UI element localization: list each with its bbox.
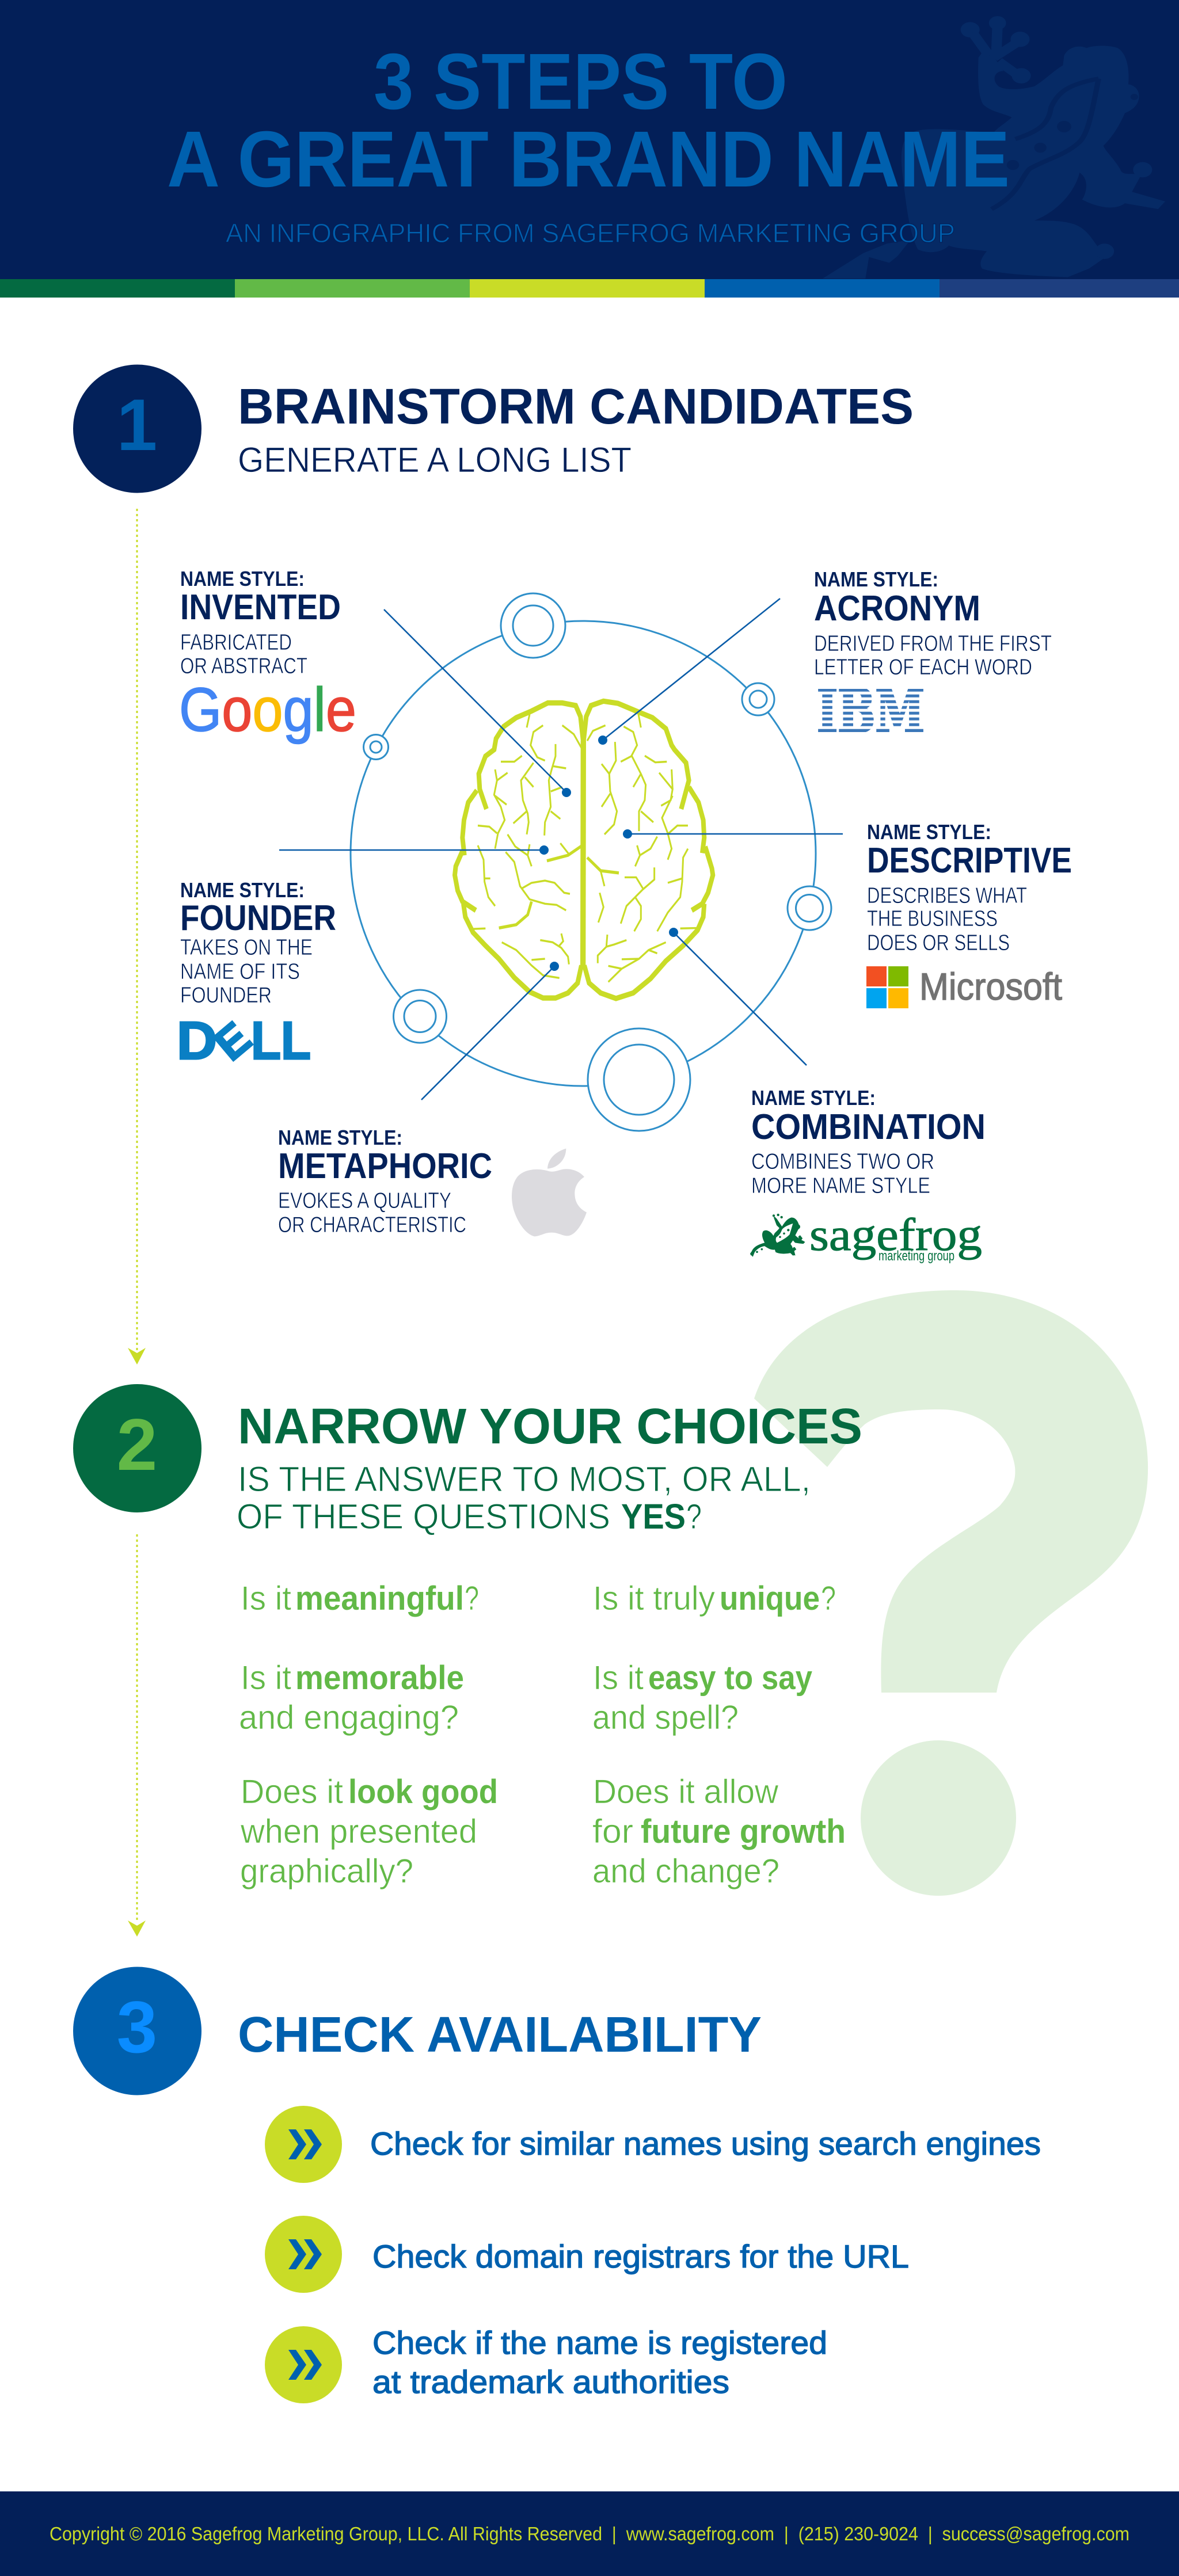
- panel: step 2 narrow your choices: [73, 1290, 1148, 1937]
- name style: acronym: LETTER OF EACH WORD: [814, 655, 1032, 680]
- subtitle: AN INFOGRAPHIC FROM SAGEFROG MARKETING GROUP: [226, 218, 955, 248]
- icon: frog watermark: [823, 16, 1165, 279]
- step 2 number badge: [73, 1384, 201, 1512]
- question: easy to say: easy to say: [648, 1659, 812, 1697]
- question: look good: Does it: [241, 1773, 343, 1811]
- name style: metaphoric: OR CHARACTERISTIC: [278, 1213, 466, 1237]
- logo: dell: [177, 1011, 311, 1070]
- icon: small frog: [751, 1214, 804, 1256]
- name style: combination: MORE NAME STYLE: [751, 1173, 930, 1198]
- logo: microsoft: Microsoft: [919, 965, 1062, 1008]
- question: memorable: [239, 1659, 464, 1736]
- name style: acronym: NAME STYLE:: [814, 567, 938, 591]
- name style: invented: [179, 567, 356, 744]
- arrow: step 1 to step 2: [128, 509, 146, 1365]
- icon: chevrons: [265, 2106, 342, 2183]
- panel: step 1 brainstorm candidates: [73, 365, 1072, 1365]
- name style: founder: TAKES ON THE: [180, 935, 313, 960]
- name style: descriptive: NAME STYLE:: [867, 820, 991, 844]
- question: future growth: Does it allow: [593, 1773, 779, 1811]
- step 1 heading: BRAINSTORM CANDIDATES: [238, 379, 914, 435]
- title: A GREAT BRAND NAME: [167, 115, 1010, 204]
- question: meaningful: ?: [465, 1580, 479, 1617]
- title: [167, 37, 1010, 204]
- name style: invented: FABRICATED: [180, 630, 292, 655]
- name style: descriptive: [866, 820, 1072, 1008]
- logo: sagefrog: [751, 1210, 982, 1264]
- step 2 subheading: OF THESE QUESTIONS: [237, 1497, 610, 1536]
- check item: domain registrars: [265, 2216, 909, 2293]
- question: memorable: Is it: [241, 1659, 291, 1697]
- panel: step 3 check availability: [73, 1967, 1041, 2403]
- name style: founder: NAME STYLE:: [180, 878, 305, 902]
- question: future growth: for: [592, 1813, 633, 1850]
- name style: metaphoric: METAPHORIC: [278, 1146, 492, 1186]
- name style: combination: [751, 1086, 986, 1264]
- step 1 number badge: 1: [117, 384, 157, 466]
- icon: chevrons: [265, 2326, 342, 2403]
- question: unique: unique: [720, 1580, 820, 1617]
- name style: combination: COMBINATION: [751, 1107, 986, 1147]
- step 1 number badge: [73, 365, 201, 493]
- check item: domain registrars: Check domain registrars for the URL: [372, 2238, 909, 2274]
- name style: founder: NAME OF ITS: [180, 959, 300, 984]
- check item: search engines: [265, 2106, 1041, 2183]
- name style: invented: NAME STYLE:: [180, 567, 305, 590]
- question: look good: when presented: [240, 1813, 477, 1850]
- icon: brain: [455, 701, 713, 999]
- step 3 number badge: [73, 1967, 201, 2095]
- question: future growth: [592, 1773, 846, 1890]
- question: easy to say: [592, 1659, 812, 1736]
- question: memorable: memorable: [295, 1659, 464, 1697]
- question: memorable: and engaging?: [239, 1699, 459, 1736]
- name style: acronym: DERIVED FROM THE FIRST: [814, 631, 1052, 656]
- name style: founder: FOUNDER: [180, 898, 336, 938]
- question: unique: Is it truly: [593, 1580, 715, 1617]
- step 3 heading: CHECK AVAILABILITY: [238, 2007, 762, 2063]
- step 2 subheading: [237, 1460, 811, 1536]
- title: 3 STEPS TO: [374, 37, 788, 126]
- callout lines and dots: [279, 599, 843, 1100]
- footer: [0, 2491, 1179, 2576]
- name style: metaphoric: NAME STYLE:: [278, 1126, 402, 1149]
- logo: dell: D: [177, 1011, 217, 1070]
- question: meaningful: Is it: [241, 1580, 291, 1617]
- logo: sagefrog: sagefrog: [809, 1210, 982, 1260]
- name style: acronym: ACRONYM: [814, 589, 980, 628]
- name style: descriptive: DESCRIBES WHAT: [867, 883, 1027, 908]
- name style: descriptive: THE BUSINESS: [867, 906, 998, 931]
- question: look good: [240, 1773, 498, 1890]
- step 2 subheading: IS THE ANSWER TO MOST, OR ALL,: [238, 1460, 811, 1499]
- name style: descriptive: DESCRIPTIVE: [867, 841, 1072, 881]
- question: future growth: future growth: [641, 1813, 846, 1850]
- name style: invented: OR ABSTRACT: [180, 654, 307, 679]
- arrow: step 2 to step 3: [128, 1534, 146, 1937]
- step 3 number badge: 3: [117, 1986, 157, 2068]
- check item: trademark authorities: at trademark authorities: [372, 2364, 729, 2400]
- logo: google: Google: [179, 675, 356, 744]
- header banner: [0, 0, 1179, 298]
- icon: chevrons: [265, 2216, 342, 2293]
- step 2 subheading: ?: [686, 1497, 702, 1536]
- name style: metaphoric: [278, 1126, 587, 1237]
- question: unique: ?: [821, 1580, 836, 1617]
- question: look good: graphically?: [240, 1853, 413, 1890]
- logo: apple: [512, 1149, 587, 1236]
- logo: sagefrog: marketing group: [878, 1248, 954, 1264]
- logo: ibm: IBM: [817, 676, 925, 746]
- diagram: brain with orbit ring: [279, 593, 843, 1131]
- colour band: [0, 279, 1179, 298]
- name style: metaphoric: EVOKES A QUALITY: [278, 1188, 451, 1213]
- orbit ring: [351, 593, 831, 1131]
- name style: combination: COMBINES TWO OR: [751, 1149, 934, 1174]
- name style: acronym: [812, 567, 1052, 746]
- name style: descriptive: DOES OR SELLS: [867, 931, 1010, 955]
- name style: founder: [177, 878, 336, 1070]
- logo: dell: E: [205, 1012, 260, 1070]
- name style: combination: NAME STYLE:: [751, 1086, 876, 1110]
- step 2 number badge: 2: [117, 1404, 157, 1485]
- check item: search engines: Check for similar names using search engines: [370, 2125, 1041, 2162]
- question: future growth: and change?: [592, 1853, 779, 1890]
- step 2 subheading: YES: [621, 1497, 686, 1536]
- step 1 subheading: GENERATE A LONG LIST: [238, 440, 632, 479]
- check item: trademark authorities: [265, 2325, 827, 2403]
- question: easy to say: and spell?: [592, 1699, 739, 1736]
- logo: microsoft: [866, 965, 1062, 1008]
- large question mark background: [754, 1290, 1148, 1896]
- question: meaningful: meaningful: [295, 1580, 464, 1617]
- step 2 heading: NARROW YOUR CHOICES: [238, 1398, 862, 1454]
- check item: trademark authorities: Check if the name is registered: [372, 2325, 827, 2361]
- logo: dell: LL: [251, 1011, 311, 1070]
- question: easy to say: Is it: [593, 1659, 644, 1697]
- question: unique: [593, 1580, 836, 1617]
- name style: invented: INVENTED: [180, 588, 341, 627]
- question: look good: look good: [348, 1773, 498, 1811]
- name style: founder: FOUNDER: [180, 983, 272, 1008]
